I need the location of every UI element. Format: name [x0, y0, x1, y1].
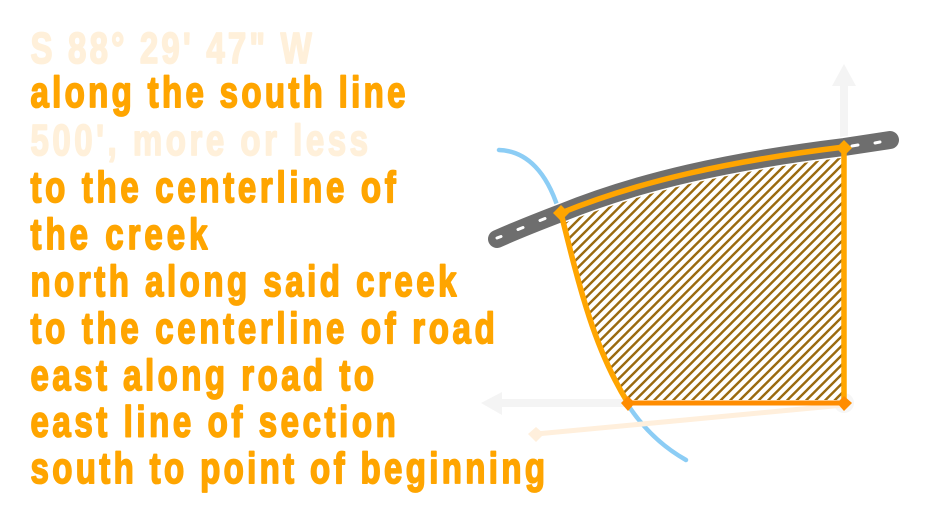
- line: north along said creek: north along said creek: [31, 258, 457, 306]
- creek: [499, 150, 686, 460]
- origin halo: [834, 393, 854, 413]
- faded bearing line: [528, 405, 844, 442]
- line: south to point of beginning: south to point of beginning: [31, 445, 545, 493]
- arrow: north: [832, 64, 856, 140]
- hatched parcel: [561, 150, 842, 400]
- line: bearing: S 88° 29' 47" W: [31, 25, 312, 73]
- road centre dashes: [497, 142, 880, 238]
- line: to the centerline of: to the centerline of: [31, 164, 397, 212]
- line: east along road to: east along road to: [31, 352, 374, 400]
- line: the creek: the creek: [31, 211, 208, 259]
- line: east line of section: east line of section: [31, 398, 396, 447]
- corner markers: [553, 140, 852, 411]
- line: distance: 500', more or less: [31, 117, 368, 165]
- line: to the centerline of road: to the centerline of road: [31, 305, 495, 353]
- arrow: west: [481, 392, 630, 415]
- line: along the south line: along the south line: [31, 69, 406, 117]
- road: [497, 140, 890, 239]
- legal description text: [31, 25, 545, 493]
- parcel boundary: [561, 147, 844, 403]
